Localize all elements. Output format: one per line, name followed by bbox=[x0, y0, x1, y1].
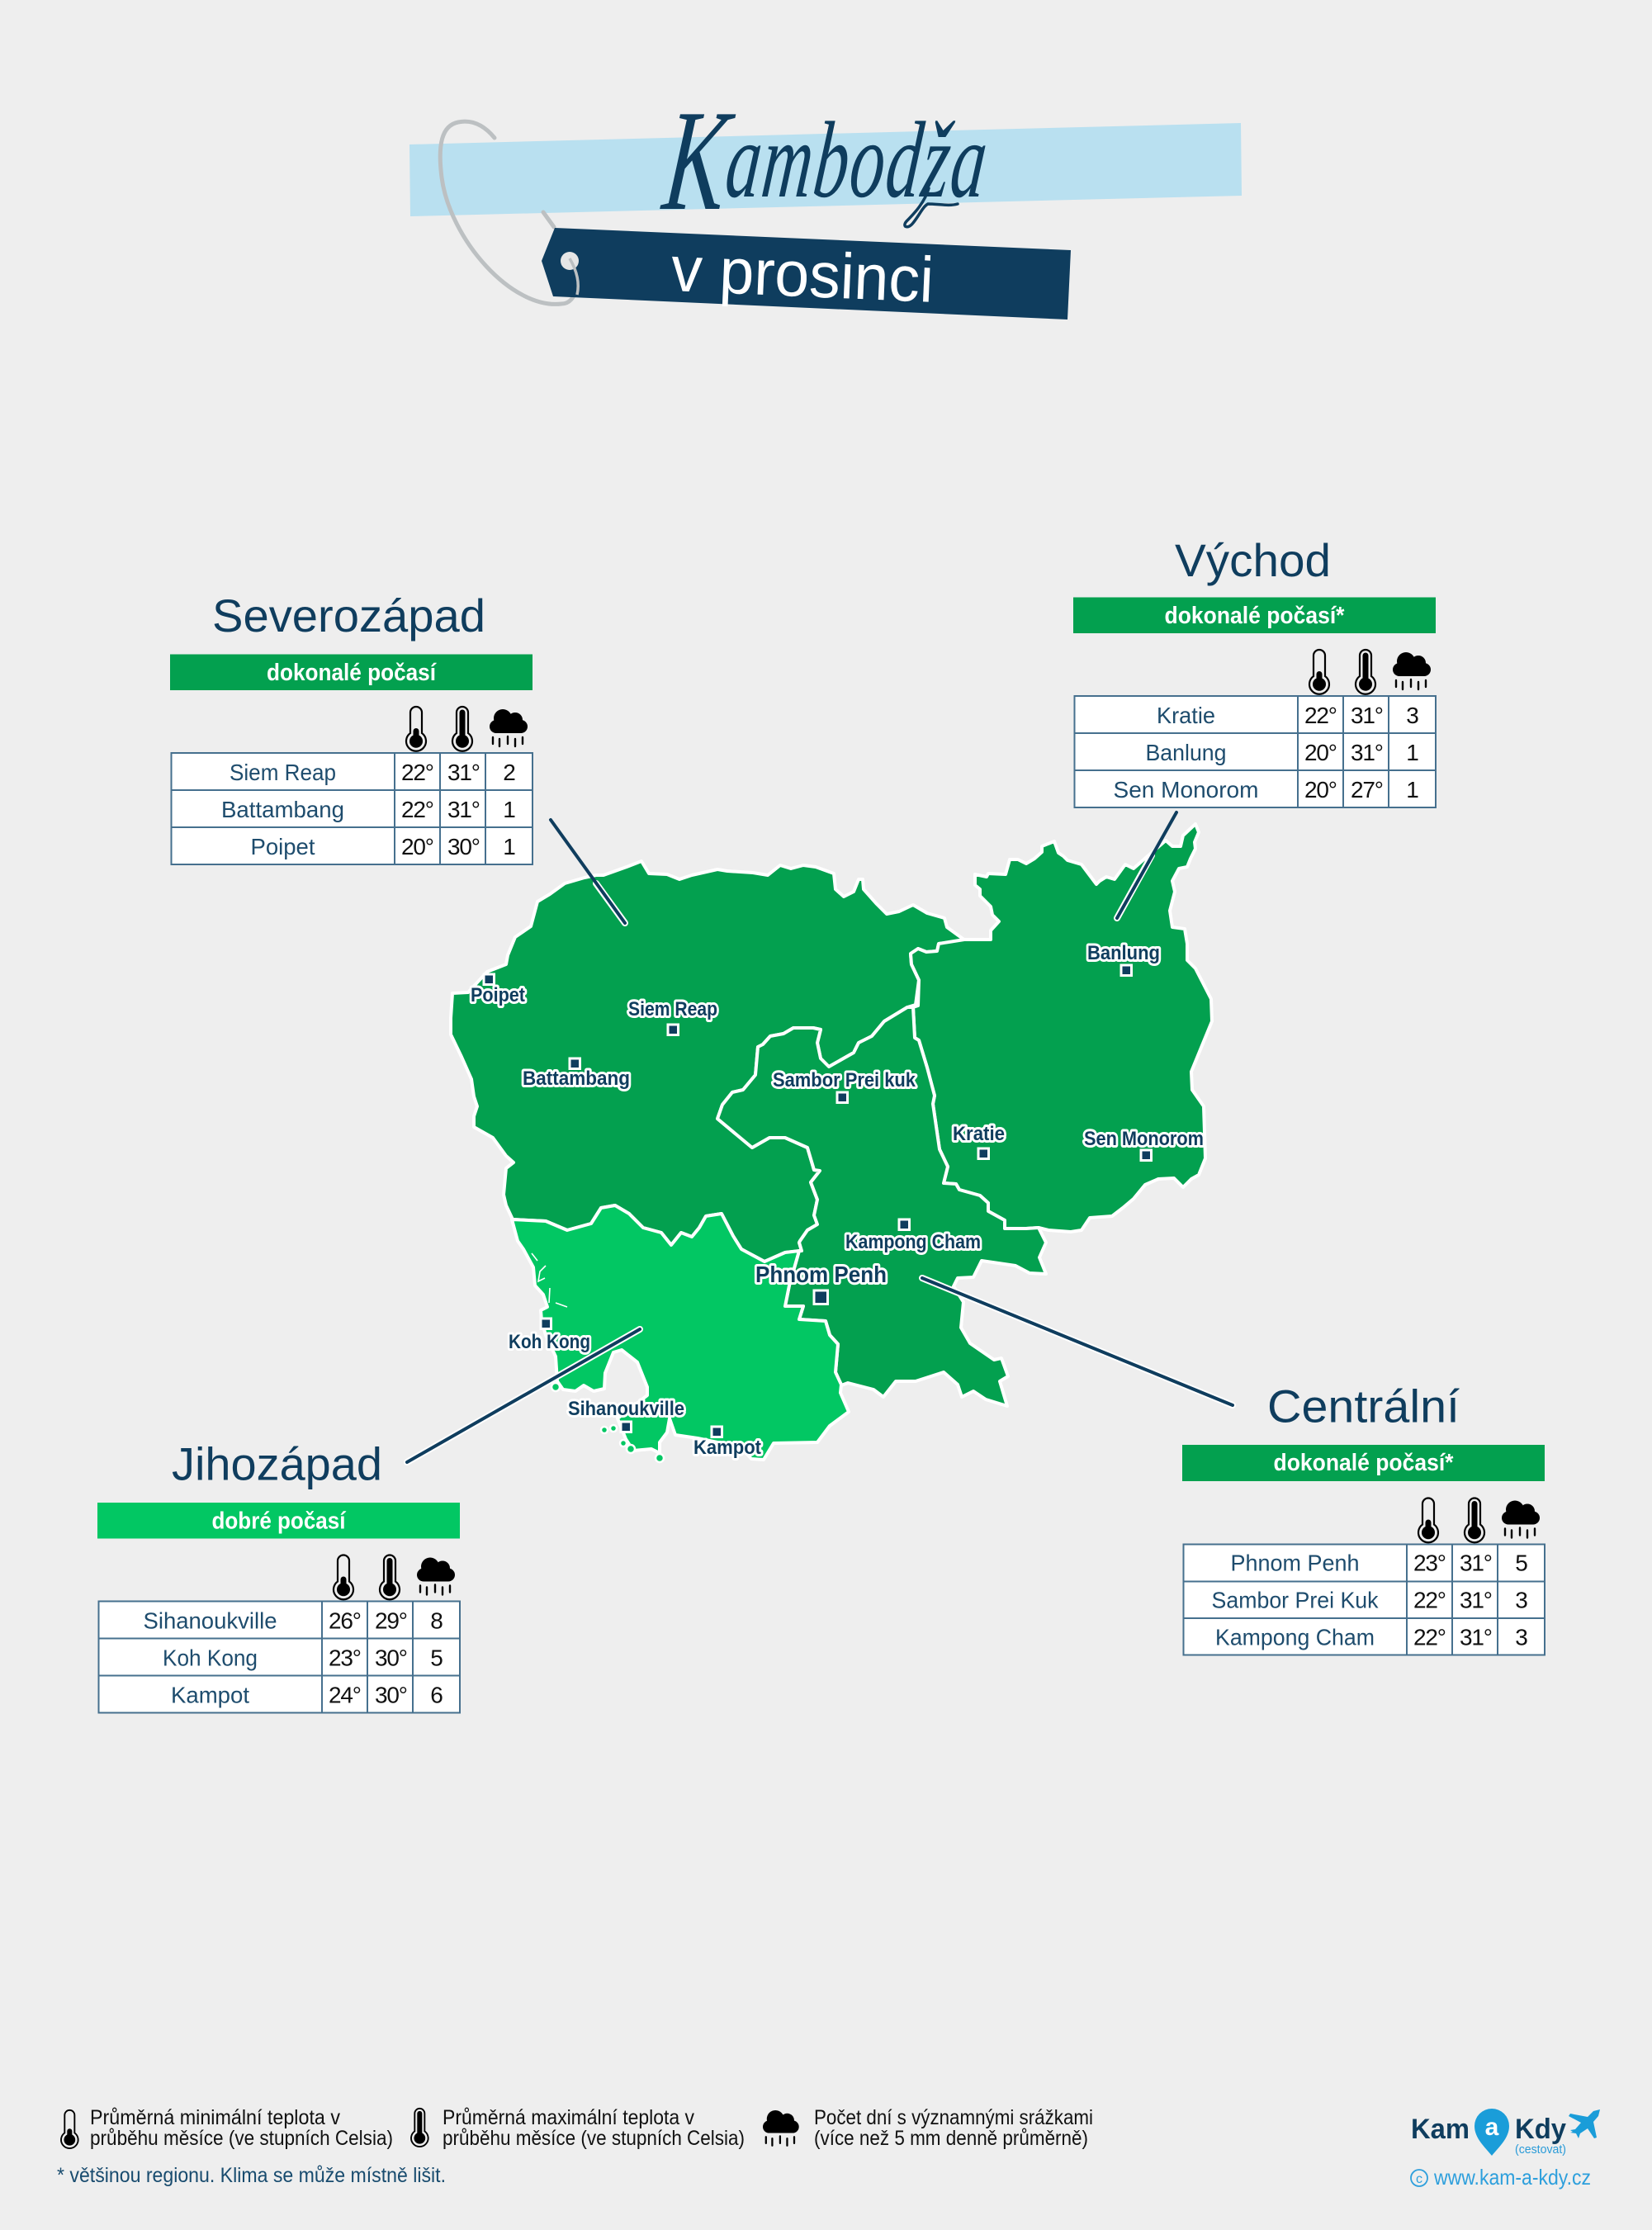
heading: Severozápad bbox=[212, 589, 485, 642]
icon: rain bbox=[490, 709, 528, 746]
legend text: rain bbox=[814, 2106, 1093, 2150]
tag hole bbox=[561, 252, 579, 270]
data table: 30° bbox=[375, 1645, 408, 1671]
weather bar: dokonalé počasí* bbox=[1164, 603, 1345, 629]
data table: 22° bbox=[1413, 1587, 1446, 1613]
region: Jihozápad bbox=[512, 1205, 849, 1460]
legend icon: min temperature bbox=[61, 2110, 78, 2148]
data table: Phnom Penh bbox=[1230, 1551, 1359, 1575]
icon: min temperature bbox=[1418, 1498, 1438, 1542]
data table: Battambang bbox=[221, 797, 344, 822]
city labels: Kratie bbox=[953, 1123, 1005, 1145]
city labels: Kampong Cham bbox=[845, 1231, 981, 1253]
city labels: Sen Monorom bbox=[1084, 1128, 1204, 1150]
data table: 22° bbox=[1413, 1625, 1446, 1650]
icon: rain bbox=[1502, 1501, 1540, 1537]
callout line: Východ bbox=[1117, 812, 1176, 918]
copyright and website: www.kam-a-kdy.cz bbox=[1433, 2165, 1591, 2190]
data table: 31° bbox=[1460, 1551, 1493, 1575]
title: Kambodža: K bbox=[656, 80, 740, 240]
data table: Koh Kong bbox=[163, 1645, 258, 1671]
data table: 3 bbox=[1515, 1625, 1528, 1650]
legend text: min temperature: Průměrná minimální teplota v bbox=[90, 2106, 340, 2129]
data table: 31° bbox=[1351, 740, 1384, 765]
city labels: Koh Kong bbox=[509, 1331, 590, 1353]
city labels: Poipet bbox=[471, 984, 525, 1006]
weather bar bbox=[97, 1503, 460, 1539]
icon: min temperature bbox=[334, 1555, 353, 1599]
callout line: Centrální bbox=[922, 1278, 1233, 1405]
city labels: Sambor Prei kuk bbox=[773, 1069, 916, 1091]
data table: Poipet bbox=[251, 834, 315, 859]
data table: 31° bbox=[447, 760, 480, 785]
data table: 23° bbox=[1413, 1551, 1446, 1575]
city labels: Kampot bbox=[693, 1437, 761, 1459]
weather bar: dokonalé počasí bbox=[267, 660, 437, 686]
legend icon: max temperature bbox=[411, 2109, 428, 2147]
data table: Sen Monorom bbox=[1113, 777, 1258, 803]
legend text: max temperature bbox=[443, 2106, 745, 2150]
logo word Kam: Kam bbox=[1411, 2114, 1470, 2145]
title: Kambodža: ambodža bbox=[721, 100, 994, 221]
light blue title stripe bbox=[409, 123, 1242, 216]
icon: max temperature bbox=[380, 1555, 400, 1599]
data table: 31° bbox=[1351, 703, 1384, 728]
data table: 20° bbox=[1304, 740, 1337, 765]
data table: 8 bbox=[430, 1608, 443, 1633]
icon: plane bbox=[1569, 2109, 1600, 2138]
data table bbox=[99, 1602, 460, 1712]
legend icon: rain bbox=[763, 2110, 799, 2146]
title flourish bbox=[905, 188, 958, 227]
panel: Centrální bbox=[1182, 1380, 1545, 1655]
data table: Kampot bbox=[171, 1683, 249, 1707]
data table: 31° bbox=[1460, 1587, 1493, 1613]
city labels: Phnom Penh bbox=[755, 1262, 887, 1287]
data table: 26° bbox=[329, 1608, 362, 1633]
data table: 22° bbox=[401, 760, 434, 785]
data table bbox=[172, 753, 533, 864]
data table: Sihanoukville bbox=[144, 1608, 277, 1633]
city markers bbox=[484, 965, 1151, 1437]
data table bbox=[1184, 1544, 1545, 1655]
legend text: min temperature bbox=[90, 2106, 393, 2150]
title banner bbox=[409, 80, 1242, 320]
callout line: Severozápad bbox=[551, 820, 625, 923]
map of Cambodia bbox=[407, 812, 1233, 1462]
data table: 5 bbox=[1515, 1551, 1528, 1575]
data table: 2 bbox=[503, 760, 516, 785]
weather bar bbox=[1073, 598, 1436, 633]
icon: rain bbox=[417, 1557, 455, 1595]
data table: 27° bbox=[1351, 777, 1384, 803]
tag string over hole bbox=[570, 258, 578, 295]
panel: Východ bbox=[1073, 534, 1436, 807]
city labels: Banlung bbox=[1087, 942, 1160, 964]
data table: 3 bbox=[1406, 703, 1419, 728]
city labels: Sihanoukville bbox=[568, 1398, 684, 1420]
callout line: Jihozápad bbox=[407, 1329, 640, 1462]
data table: 1 bbox=[1406, 777, 1419, 803]
data table: 24° bbox=[329, 1683, 362, 1707]
data table: 3 bbox=[1515, 1587, 1528, 1613]
data table: Kampong Cham bbox=[1215, 1625, 1375, 1650]
heading: Východ bbox=[1175, 534, 1331, 586]
weather bar bbox=[1182, 1445, 1545, 1481]
heading: Centrální bbox=[1267, 1380, 1460, 1432]
logo: Kam a Kdy bbox=[1411, 2109, 1600, 2190]
footnote: * většinou regionu. Klima se může místně lišit. bbox=[57, 2164, 446, 2187]
weather bar bbox=[170, 654, 533, 690]
data table: 22° bbox=[401, 797, 434, 822]
data table: Kratie bbox=[1157, 703, 1215, 728]
icon: rain bbox=[1393, 652, 1431, 689]
subtitle: v prosinci: v prosinci bbox=[670, 232, 935, 316]
legend text: max temperature: průběhu měsíce (ve stupních Celsia) bbox=[443, 2127, 745, 2150]
weather bar: dobré počasí bbox=[211, 1508, 346, 1534]
weather bar: dokonalé počasí* bbox=[1273, 1450, 1454, 1476]
heading: Jihozápad bbox=[172, 1438, 382, 1489]
copyright and website: c bbox=[1416, 2172, 1422, 2186]
city labels: Siem Reap bbox=[628, 998, 717, 1020]
data table: 6 bbox=[430, 1683, 443, 1707]
data table: 31° bbox=[1460, 1625, 1493, 1650]
icon: min temperature bbox=[406, 707, 426, 751]
city labels: Battambang bbox=[523, 1068, 630, 1090]
logo pin: a bbox=[1485, 2114, 1499, 2141]
data table: 29° bbox=[375, 1608, 408, 1633]
data table bbox=[1075, 696, 1436, 807]
logo word Kdy: Kdy bbox=[1515, 2114, 1566, 2145]
data table: 1 bbox=[503, 797, 516, 822]
legend text: max temperature: Průměrná maximální teplota v bbox=[443, 2106, 694, 2129]
data table: Banlung bbox=[1146, 740, 1227, 765]
panel: Severozápad bbox=[170, 589, 533, 864]
legend text: min temperature: průběhu měsíce (ve stupních Celsia) bbox=[90, 2127, 393, 2150]
icon: max temperature bbox=[1356, 650, 1375, 694]
city labels bbox=[471, 942, 1204, 1459]
data table: 1 bbox=[1406, 740, 1419, 765]
region: Východ bbox=[911, 824, 1212, 1232]
data table: Sambor Prei Kuk bbox=[1212, 1587, 1379, 1613]
tag string bbox=[440, 121, 577, 304]
islands bbox=[551, 1383, 664, 1462]
logo pin bbox=[1474, 2109, 1509, 2156]
data table: 22° bbox=[1304, 703, 1337, 728]
legend text: rain: (více než 5 mm denně průměrně) bbox=[814, 2127, 1088, 2150]
data table: 31° bbox=[447, 797, 480, 822]
icon: max temperature bbox=[452, 707, 472, 751]
legend text: rain: Počet dní s významnými srážkami bbox=[814, 2106, 1093, 2129]
dark navy tag bbox=[542, 228, 1071, 320]
data table: 1 bbox=[503, 834, 516, 859]
data table: 5 bbox=[430, 1645, 443, 1671]
data table: 20° bbox=[401, 834, 434, 859]
region: Severozápad bbox=[451, 861, 965, 1262]
data table: Siem Reap bbox=[230, 760, 336, 785]
data table: 30° bbox=[375, 1683, 408, 1707]
logo caption: (cestovat) bbox=[1515, 2142, 1566, 2157]
data table: 20° bbox=[1304, 777, 1337, 803]
legend bbox=[61, 2106, 1093, 2150]
region: Centrální bbox=[717, 1007, 1046, 1406]
icon: max temperature bbox=[1465, 1498, 1484, 1542]
data table: 23° bbox=[329, 1645, 362, 1671]
data table: 30° bbox=[447, 834, 480, 859]
icon: min temperature bbox=[1309, 650, 1329, 694]
panel: Jihozápad bbox=[97, 1438, 460, 1712]
